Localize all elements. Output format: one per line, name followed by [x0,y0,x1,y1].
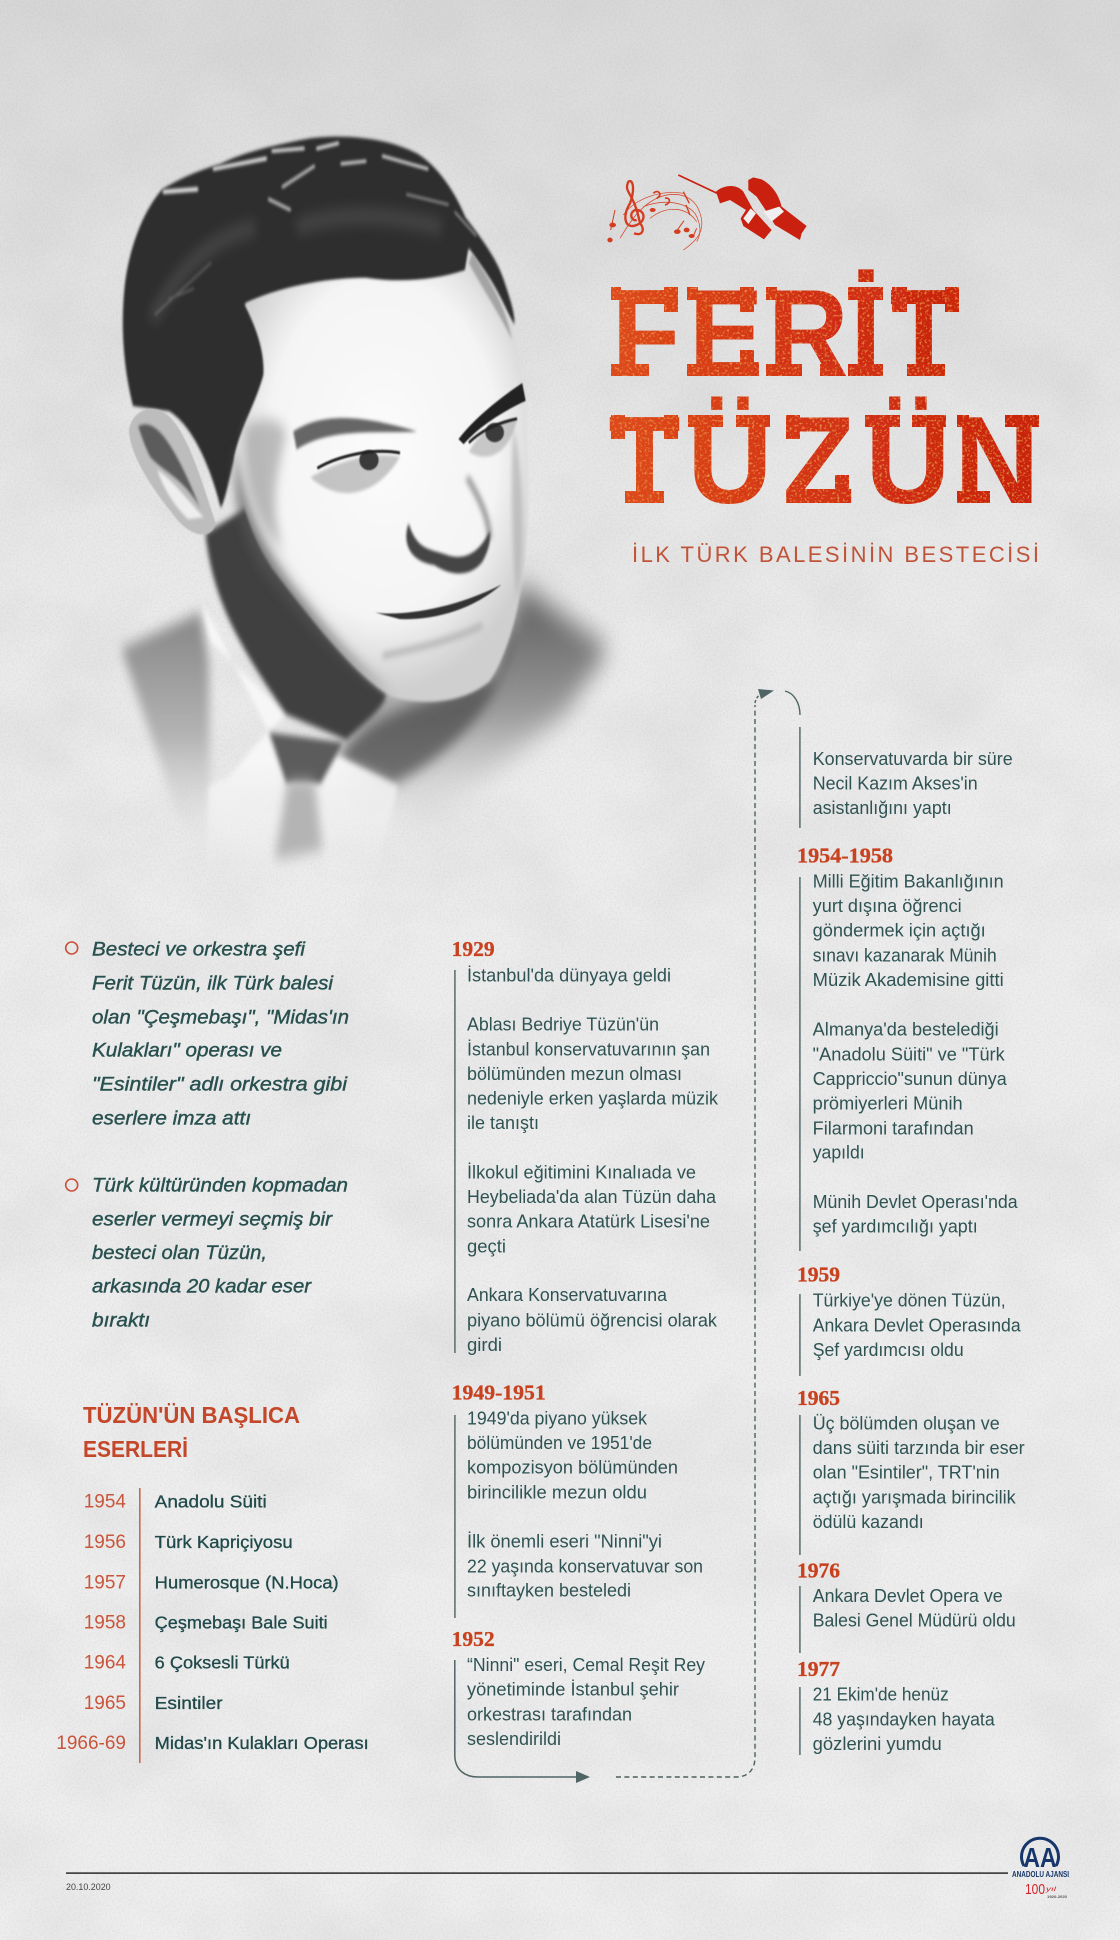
timeline entry: 1977: gözlerini yumdu [813,1734,942,1754]
intro bullet one: Besteci ve orkestra şefi [92,939,306,961]
list of major works: 1954 [84,1492,126,1513]
arrow: dashed connector up to next column [616,689,800,1777]
timeline entry: 1952: “Ninni" eseri, Cemal Reşit Rey [467,1655,705,1675]
intro bullet one: Kulakları" operası ve [92,1040,282,1062]
timeline entry: 1952 continued: Necil Kazım Akses'in [813,773,978,793]
logo: Anadolu Ajansi [1012,1838,1069,1899]
heading: major works: TÜZÜN'ÜN BAŞLICA [83,1402,300,1428]
timeline entry: 1929: girdi [467,1335,502,1355]
list of major works: 1965 [84,1693,126,1714]
timeline entry: 1949-1951 [452,1380,703,1618]
list of major works: 1956 [84,1532,126,1553]
footer rule and date: 20.10.2020 [66,1882,111,1893]
timeline entry: 1977: 1977 [797,1657,840,1681]
timeline entry: 1952 [452,1627,705,1749]
timeline entry: 1965: olan "Esintiler", TRT'nin [813,1463,1000,1483]
logo: Anadolu Ajansi: yıl [1044,1887,1057,1893]
timeline entry: 1959: 1959 [797,1263,840,1287]
timeline entry: 1952: 1952 [452,1627,495,1651]
timeline entry: 1929: nedeniyle erken yaşlarda müzik [467,1089,719,1109]
timeline entry: 1954-1958: Milli Eğitim Bakanlığının [813,871,1004,891]
list of major works [56,1488,369,1763]
timeline entry: 1976: 1976 [797,1558,840,1582]
timeline entry: 1929: İstanbul konservatuvarının şan [467,1039,710,1059]
timeline entry: 1959: Türkiye'ye dönen Tüzün, [813,1291,1006,1311]
timeline entry: 1977: 21 Ekim'de henüz [813,1685,949,1705]
timeline entry: 1954-1958: sınavı kazanarak Münih [813,946,997,966]
timeline entry: 1949-1951: 22 yaşında konservatuvar son [467,1556,703,1576]
timeline entry: 1954-1958: şef yardımcılığı yaptı [813,1217,978,1237]
timeline entry: 1949-1951: 1949-1951 [452,1380,546,1404]
timeline entry: 1976: Ankara Devlet Opera ve [813,1586,1003,1606]
timeline entry: 1965: Üç bölümden oluşan ve [813,1413,1000,1433]
timeline entry: 1929: geçti [467,1236,506,1256]
timeline entry: 1952: yönetiminde İstanbul şehir [467,1680,679,1700]
timeline entry: 1965: ödülü kazandı [813,1512,924,1532]
hair [123,137,514,508]
portrait photo of Ferit Tüzün [121,137,610,880]
timeline entry: 1965: 1965 [797,1386,840,1410]
timeline entry: 1929 [452,937,719,1355]
timeline entry: 1952: orkestrası tarafından [467,1704,632,1724]
timeline entry: 1929: İstanbul'da dünyaya geldi [467,966,671,986]
ear [129,409,216,534]
timeline entry: 1959: Ankara Devlet Operasında [813,1315,1022,1335]
subtitle: İLK TÜRK BALESİNİN BESTECİSİ [632,542,1039,567]
timeline entry: 1954-1958: prömiyerleri Münih [813,1094,963,1114]
intro bullet two: bıraktı [92,1309,150,1331]
timeline entry: 1959 [797,1263,1022,1376]
timeline entry: 1954-1958: Münih Devlet Operası'nda [813,1192,1019,1212]
list of major works: Humerosque (N.Hoca) [155,1572,339,1592]
intro bullet one: eserlere imza attı [92,1107,251,1129]
timeline entry: 1954-1958: yurt dışına öğrenci [813,896,962,916]
timeline entry: 1949-1951: sınıftayken besteledi [467,1581,631,1601]
timeline entry: 1949-1951: birincilikle mezun oldu [467,1482,647,1502]
list of major works: Esintiler [155,1693,223,1713]
title: FERİT TÜZÜN [609,264,1039,530]
list of major works: Midas'ın Kulakları Operası [155,1733,369,1753]
timeline entry: 1954-1958: Müzik Akademisine gitti [813,970,1004,990]
icon: treble clef with staff [611,181,702,250]
left eyebrow and eye [293,418,417,449]
logo: Anadolu Ajansi: 100 [1025,1881,1045,1898]
list of major works: 1964 [84,1653,126,1674]
list of major works: 1957 [84,1572,126,1593]
timeline entry: 1949-1951: bölümünden ve 1951'de [467,1433,652,1453]
arrow: solid connector from first column [455,1660,590,1783]
timeline entry: 1949-1951: 1949'da piyano yüksek [467,1408,648,1428]
timeline entry: 1965 [797,1386,1025,1555]
intro bullet two: Türk kültüründen kopmadan [92,1175,348,1197]
bullet marker [66,942,78,954]
timeline entry: 1976 [797,1558,1016,1653]
heading: major works: ESERLERİ [83,1436,188,1462]
timeline entry: 1929: Heybeliada'da alan Tüzün daha [467,1187,717,1207]
timeline entry: 1977: 48 yaşındayken hayata [813,1709,996,1729]
timeline entry: 1929: Ankara Konservatuvarına [467,1285,668,1305]
intro bullet one [66,939,349,1129]
heading: major works [83,1402,300,1462]
bullet marker [66,1179,78,1191]
timeline entry: 1965: açtığı yarışmada birincilik [813,1487,1017,1507]
list of major works: Çeşmebaşı Bale Suiti [155,1612,328,1632]
title: FERİT TÜZÜN: FERİT [612,264,958,402]
intro bullet two [66,1175,348,1331]
logo: Anadolu Ajansi: 1920-2020 [1047,1894,1068,1899]
timeline entry: 1952: seslendirildi [467,1729,561,1749]
timeline entry: 1959: Şef yardımcısı oldu [813,1340,964,1360]
logo: Anadolu Ajansi: ANADOLU AJANSI [1012,1870,1069,1879]
timeline entry: 1976: Balesi Genel Müdürü oldu [813,1611,1016,1631]
hair highlights [155,143,476,314]
list of major works: 1966-69 [56,1733,126,1754]
timeline entry: 1929: 1929 [452,937,495,961]
timeline entry: 1954-1958: Filarmoni tarafından [813,1118,974,1138]
timeline entry: 1929: bölümünden mezun olması [467,1064,682,1084]
timeline entry: 1952 continued: Konservatuvarda bir süre [813,749,1013,769]
face [235,250,528,702]
intro bullet two: arkasında 20 kadar eser [92,1275,313,1297]
timeline entry: 1929: piyano bölümü öğrencisi olarak [467,1310,718,1330]
intro bullet one: Ferit Tüzün, ilk Türk balesi [92,972,334,994]
timeline entry: 1929: sonra Ankara Atatürk Lisesi'ne [467,1212,710,1232]
timeline entry: 1929: Ablası Bedriye Tüzün'ün [467,1015,659,1035]
timeline entry: 1954-1958: Almanya'da bestelediği [813,1020,999,1040]
right eyebrow and eye [459,383,526,444]
timeline entry: 1929: İlkokul eğitimini Kınalıada ve [467,1162,696,1182]
intro bullet two: eserler vermeyi seçmiş bir [92,1208,334,1230]
timeline entry: 1952 continued: asistanlığını yaptı [813,798,952,818]
timeline entry: 1929: ile tanıştı [467,1113,539,1133]
intro bullet one: "Esintiler" adlı orkestra gibi [92,1074,348,1096]
timeline entry: 1965: dans süiti tarzında bir eser [813,1438,1025,1458]
list of major works: 6 Çoksesli Türkü [155,1653,290,1673]
timeline entry: 1954-1958: yapıldı [813,1143,865,1163]
timeline entry: 1954-1958: "Anadolu Süiti" ve "Türk [813,1044,1006,1064]
timeline entry: 1954-1958: 1954-1958 [797,844,893,868]
timeline entry: 1949-1951: İlk önemli eseri "Ninni"yi [467,1532,662,1552]
list of major works: Anadolu Süiti [155,1492,267,1512]
timeline entry: 1954-1958 [797,844,1019,1251]
title: FERİT TÜZÜN: TÜZÜN [609,391,1039,530]
intro bullet two: besteci olan Tüzün, [92,1242,267,1264]
timeline entry: 1977 [797,1657,996,1755]
icon: baton [678,175,717,193]
intro bullet one: olan "Çeşmebaşı", "Midas'ın [92,1006,349,1028]
mouth [375,584,502,619]
timeline entry: 1952 continued [799,727,1013,828]
nose [467,477,490,539]
timeline entry: 1954-1958: Cappriccio"sunun dünya [813,1069,1008,1089]
timeline entry: 1949-1951: kompozisyon bölümünden [467,1458,678,1478]
list of major works: 1958 [84,1612,126,1633]
icon: conductor hands and musical notes [607,175,807,250]
list of major works: Türk Kapriçiyosu [155,1532,293,1552]
logo: Anadolu Ajansi: AA [1024,1842,1056,1873]
timeline entry: 1954-1958: göndermek için açtığı [813,921,986,941]
icon: hands [716,186,772,239]
